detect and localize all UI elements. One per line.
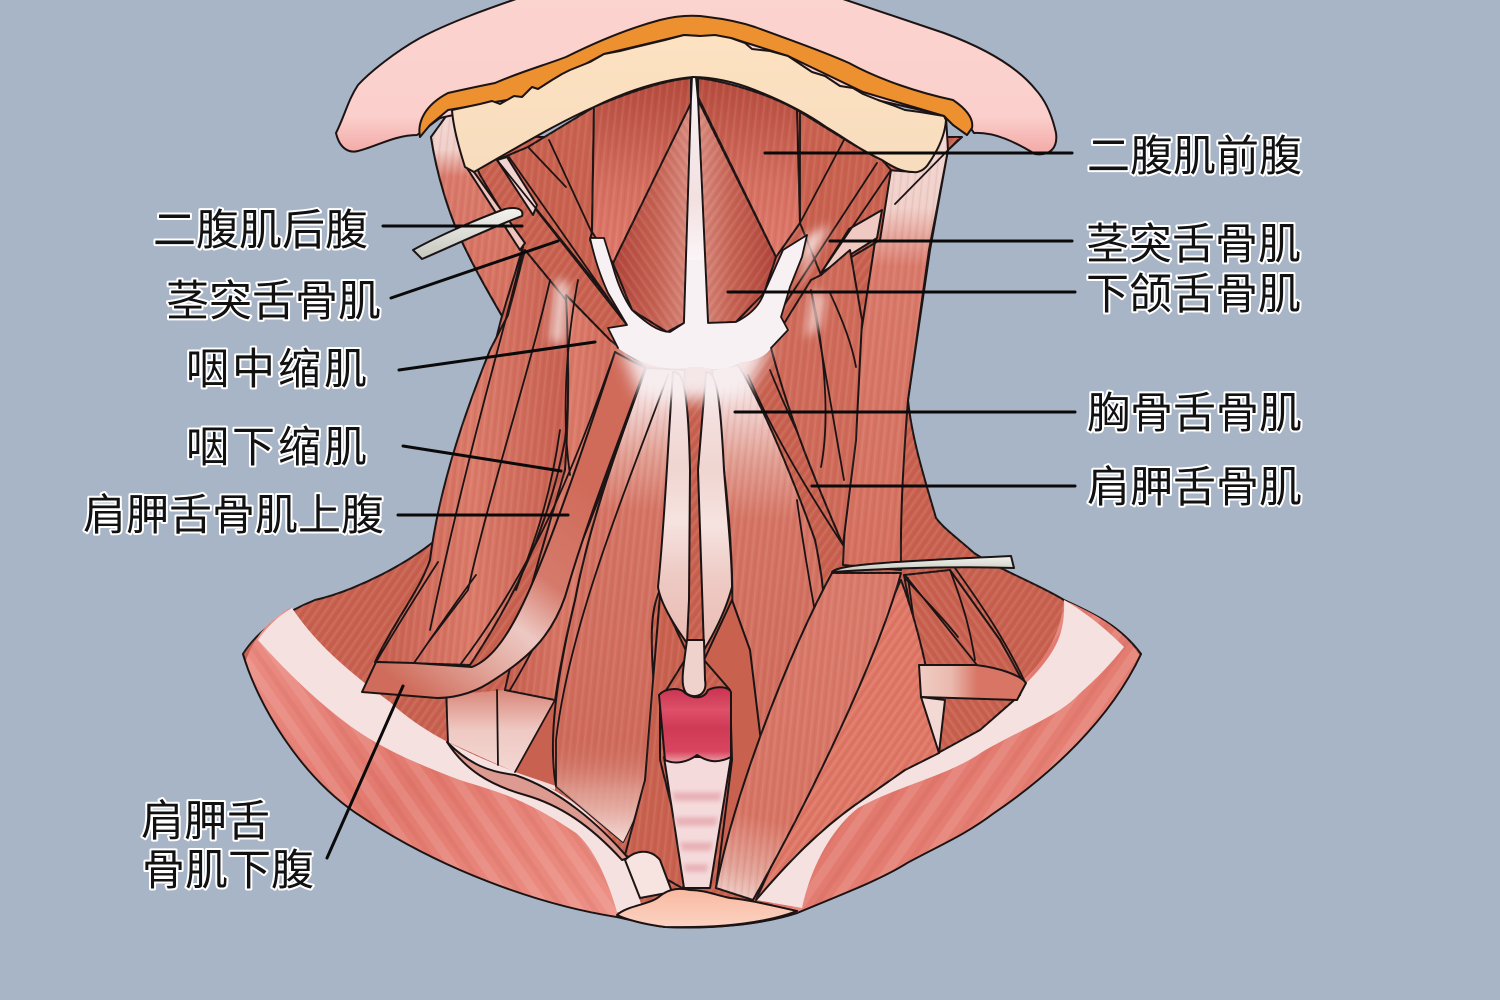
panel: left outer platysma band (246, 608, 645, 917)
label: 肩胛舌骨肌下腹: 肩胛舌 (141, 798, 270, 846)
panel: left long strap muscles (375, 250, 668, 786)
panel: right lateral scalene muscles (904, 568, 1025, 753)
label: 茎突舌骨肌 right: 茎突舌骨肌 (1086, 221, 1301, 269)
leader: 肩胛舌骨肌上腹 (398, 514, 568, 516)
bottom outline of neck base (243, 654, 1141, 927)
panel: cricoid red cartilage (659, 687, 731, 762)
panel: floor of mouth muscles right (783, 110, 891, 307)
panel: left omohyoid inferior belly (362, 352, 645, 698)
leader: 二腹肌前腹 (765, 152, 1072, 154)
leader: 茎突舌骨肌 left (391, 241, 558, 298)
soft white fade under hyoid (620, 345, 771, 400)
label: 肩胛舌骨肌: 肩胛舌骨肌 (1087, 464, 1302, 512)
panel: deep floor muscles lower left (446, 690, 557, 790)
leader: 肩胛舌骨肌 (812, 484, 1075, 488)
leader: right mandible fascia (895, 140, 958, 204)
label: 下颌舌骨肌: 下颌舌骨肌 (1086, 271, 1301, 319)
panel: right inner infrahyoid strips (771, 250, 862, 545)
label: 骨肌下腹: 骨肌下腹 (142, 847, 314, 895)
neck and shoulder muscle silhouette (243, 137, 1141, 927)
panel: deep muscle flanking trachea (625, 595, 765, 888)
label: 茎突舌骨肌 left: 茎突舌骨肌 (166, 278, 381, 326)
panel: right sternocleidomastoid lower (716, 573, 901, 900)
label: 咽中缩肌: 咽中缩肌 (186, 346, 370, 394)
panel: trachea (664, 757, 731, 888)
white clavicular band right (756, 600, 1124, 908)
panel: digastric anterior belly right (698, 78, 800, 257)
panel: mylohyoid (613, 100, 776, 332)
label: 胸骨舌骨肌: 胸骨舌骨肌 (1087, 390, 1302, 438)
leader: 二腹肌后腹 (383, 224, 522, 228)
panel: left digastric tendon loop (413, 208, 522, 259)
leader: 咽中缩肌 (399, 342, 595, 370)
label: 二腹肌前腹: 二腹肌前腹 (1087, 133, 1302, 181)
panel: left clavicular stub (625, 852, 672, 898)
label: 肩胛舌骨肌上腹: 肩胛舌骨肌上腹 (83, 492, 384, 540)
panel: clavicle strip left (447, 742, 628, 860)
panel: cream mandible (452, 35, 946, 172)
panel: left upper neck behind digastric (431, 108, 523, 316)
panel: orange bone cortex (419, 16, 972, 137)
panel: central left sternohyoid muscle (553, 368, 685, 842)
panel: white tape cut end right (832, 556, 1014, 572)
labels and leader lines right (728, 133, 1302, 512)
panel: jaw skin (336, 0, 1056, 154)
panel: central right sternohyoid muscle (712, 365, 843, 880)
white clavicular band left (258, 608, 645, 915)
label: 二腹肌后腹: 二腹肌后腹 (153, 207, 368, 255)
panel: thyroid membrane (658, 372, 732, 696)
panel: right inner neck muscle fan (756, 580, 939, 900)
panel: hyoid bone and raphe (590, 78, 807, 369)
pale tendon streak by hyoid (550, 278, 570, 345)
leader: 茎突舌骨肌 right (830, 240, 1072, 242)
leader: 咽下缩肌 (403, 446, 561, 471)
panel: digastric anterior belly left (592, 78, 691, 263)
leader: 胸骨舌骨肌 (735, 410, 1075, 414)
panel: right outer platysma band (756, 600, 1140, 913)
panel: sternum (617, 889, 797, 927)
label: 咽下缩肌: 咽下缩肌 (186, 424, 370, 472)
labels and leader lines left (83, 207, 595, 895)
panel: right sternocleidomastoid upper (843, 117, 948, 570)
leader: 肩胛舌骨肌下腹 (327, 686, 403, 858)
panel: right omohyoid inferior stump (919, 665, 1026, 753)
panel: left strap-muscle tendons (465, 107, 627, 325)
leader: 下颌舌骨肌 (728, 290, 1075, 294)
